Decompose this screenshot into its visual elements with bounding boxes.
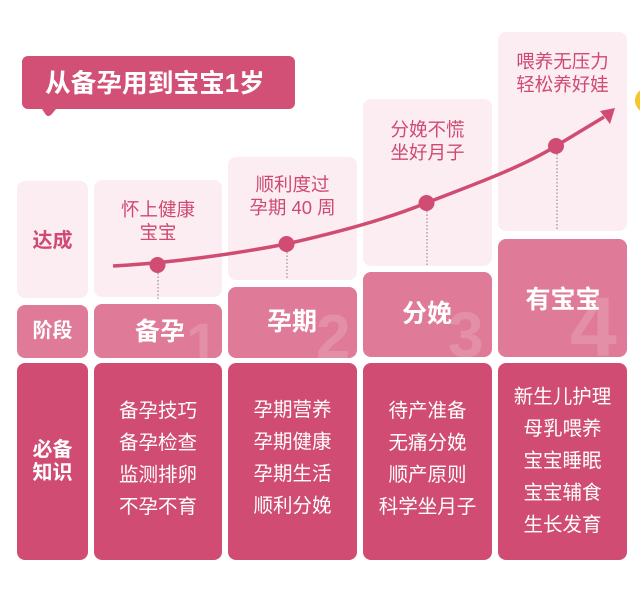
panel: knowledge 2: 孕期生活: [253, 463, 332, 485]
milestone 3: [418, 195, 434, 266]
panel: stage 4 有宝宝: 有宝宝: [525, 286, 600, 314]
panel: knowledge 2: [228, 363, 357, 560]
panel: stage 1 备孕: [94, 304, 222, 358]
milestone 1: [150, 257, 166, 301]
panel: row label 阶段: 阶段: [32, 320, 72, 342]
panel: knowledge 3: 科学坐月子: [379, 496, 476, 518]
icon: yellow circle at right edge: [635, 88, 640, 113]
panel: goal 4: 喂养无压力: [516, 51, 609, 72]
milestone 2: [278, 236, 294, 280]
panel: knowledge 4: [498, 363, 627, 560]
panel: knowledge 1: 备孕检查: [119, 432, 197, 454]
panel: goal 4: 轻松养好娃: [516, 74, 609, 94]
panel: knowledge 3: 无痛分娩: [388, 432, 466, 454]
panel: goal 4: [498, 32, 627, 231]
curve line: [113, 117, 604, 266]
panel: row label 必备知识: 必备: [32, 439, 72, 461]
panel: stage 3 分娩: 分娩: [402, 300, 452, 328]
panel: goal 3: 坐好月子: [390, 142, 464, 162]
panel: goal 2: [228, 157, 357, 280]
panel: knowledge 4: 生长发育: [523, 514, 602, 536]
panel: row label 必备知识: 知识: [32, 462, 72, 484]
panel: stage 2 孕期: [228, 287, 357, 358]
panel: row label 达成: [17, 181, 88, 298]
panel: knowledge 4: 母乳喂养: [523, 418, 602, 440]
panel: goal 3: [363, 99, 492, 266]
panel: knowledge 1: [94, 363, 222, 560]
panel: knowledge 4: 新生儿护理: [514, 386, 611, 408]
panel: knowledge 2: 顺利分娩: [253, 495, 332, 517]
panel: goal 1: 怀上健康: [121, 199, 195, 220]
panel: goal 2: 顺利度过: [255, 174, 330, 195]
panel: goal 1: 宝宝: [139, 222, 176, 242]
panel: goal 3: 分娩不慌: [390, 119, 464, 140]
panel: stage 4 有宝宝: [498, 239, 627, 357]
panel: knowledge 1: 监测排卵: [119, 464, 197, 486]
milestone 4: [548, 138, 564, 231]
panel: knowledge 4: 宝宝辅食: [523, 482, 602, 504]
title banner: 从备孕用到宝宝1岁: [45, 68, 265, 98]
arrow head: [600, 108, 615, 124]
panel: row label 阶段: [17, 305, 88, 358]
panel: knowledge 3: [363, 363, 492, 560]
panel: knowledge 4: 宝宝睡眠: [523, 450, 602, 472]
panel: stage 1 备孕: 备孕: [135, 318, 185, 346]
panel: knowledge 2: 孕期营养: [253, 399, 332, 421]
panel: knowledge 3: 待产准备: [388, 400, 466, 422]
panel: row label 达成: 达成: [32, 230, 72, 252]
panel: goal 1: [94, 180, 222, 297]
panel: goal 2: 孕期 40 周: [249, 196, 336, 218]
panel: knowledge 2: 孕期健康: [253, 431, 332, 453]
panel: knowledge 1: 不孕不育: [119, 496, 197, 518]
panel: stage 2 孕期: 孕期: [267, 308, 317, 336]
title banner: [22, 56, 295, 116]
panel: stage 3 分娩: [363, 272, 492, 357]
panel: knowledge 1: 备孕技巧: [119, 400, 197, 422]
panel: knowledge 3: 顺产原则: [388, 464, 466, 486]
panel: row label 必备知识: [17, 363, 88, 560]
